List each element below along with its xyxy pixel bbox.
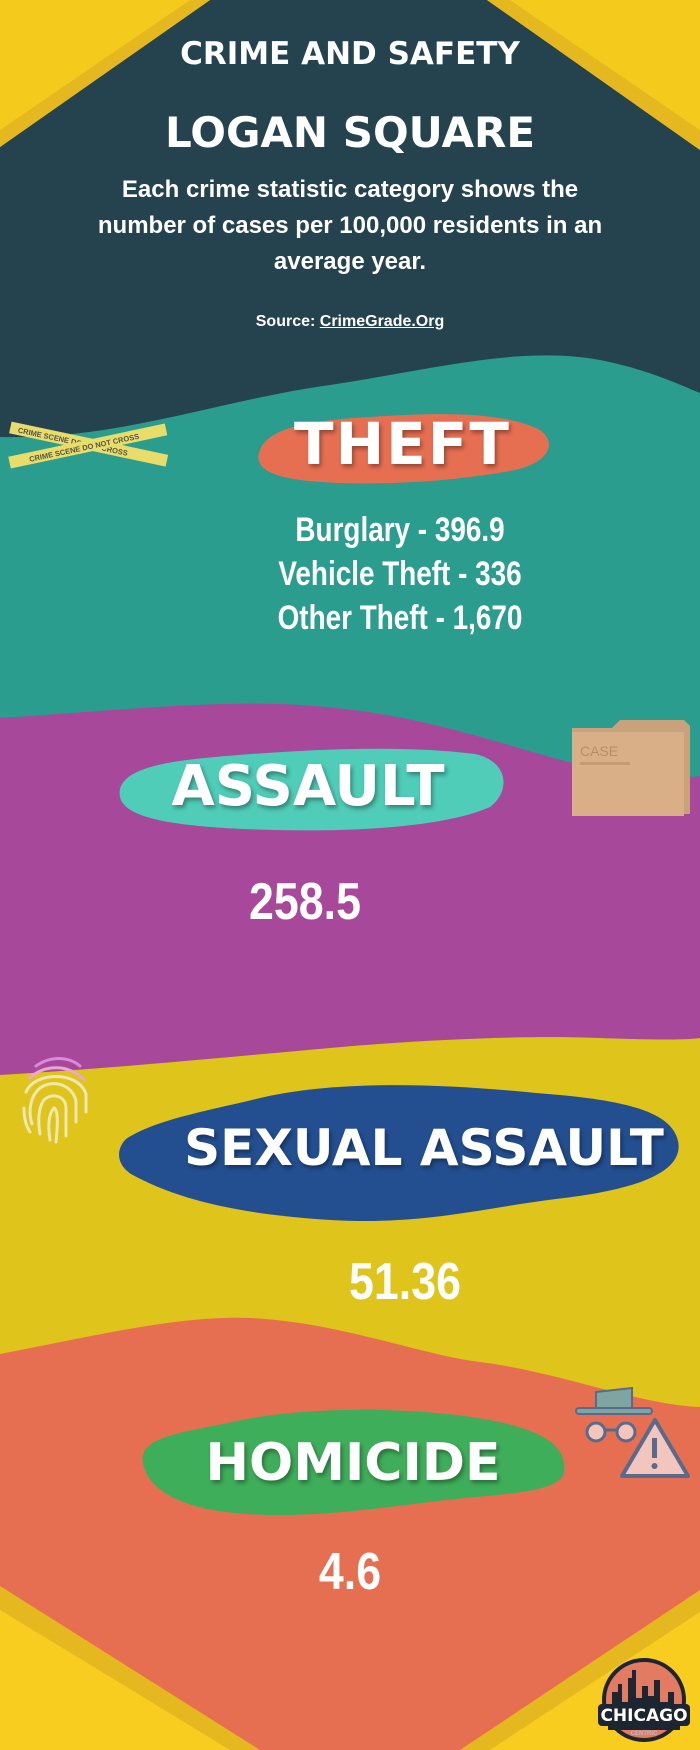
heading: assault: ASSAULT <box>171 754 445 819</box>
blob: sexual assault <box>119 1085 679 1221</box>
theft stats: Burglary - 396.9 <box>295 511 505 549</box>
icon: spy with warning <box>575 1386 690 1478</box>
blob: homicide <box>142 1410 564 1516</box>
theft stats: Other Theft - 1,670 <box>278 599 522 637</box>
title: CRIME AND SAFETY <box>180 36 520 72</box>
value: homicide: 4.6 <box>319 1543 381 1601</box>
icon: case folder <box>572 720 690 816</box>
heading: sexual assault: SEXUAL ASSAULT <box>184 1119 664 1177</box>
value: assault: 258.5 <box>249 873 361 931</box>
description text: number of cases per 100,000 residents in an <box>98 212 602 239</box>
theft stats: Vehicle Theft - 336 <box>278 555 522 593</box>
description text: Each crime statistic category shows the <box>122 176 578 203</box>
value: sexual assault: 51.36 <box>349 1253 461 1311</box>
logo: Chicago Centric: CHICAGO <box>600 1706 688 1726</box>
description text <box>98 176 602 275</box>
heading: theft: THEFT <box>294 410 511 478</box>
heading: homicide <box>142 1410 564 1516</box>
subtitle: Logan Square: LOGAN SQUARE <box>165 108 535 157</box>
description text: average year. <box>274 248 426 275</box>
logo: Chicago Centric: CENTRIC <box>631 1731 658 1737</box>
icon: fingerprint <box>22 1057 88 1144</box>
blob: theft <box>258 414 549 484</box>
source: Source: CrimeGrade.Org <box>256 313 444 330</box>
blob: assault <box>120 748 504 830</box>
heading: assault <box>120 748 504 830</box>
theft stats <box>278 511 522 637</box>
icon: crime scene tape: CRIME SCENE DO NOT CROSS <box>28 432 140 464</box>
icon: crime scene tape: CRIME SCENE DO NOT CROSS <box>17 426 129 458</box>
heading: sexual assault <box>119 1085 679 1221</box>
icon: case folder: CASE <box>580 743 618 759</box>
logo: Chicago Centric <box>598 1658 690 1742</box>
heading: homicide: HOMICIDE <box>205 1433 500 1493</box>
icon: crime scene tape <box>8 422 168 468</box>
heading: theft <box>258 410 549 484</box>
